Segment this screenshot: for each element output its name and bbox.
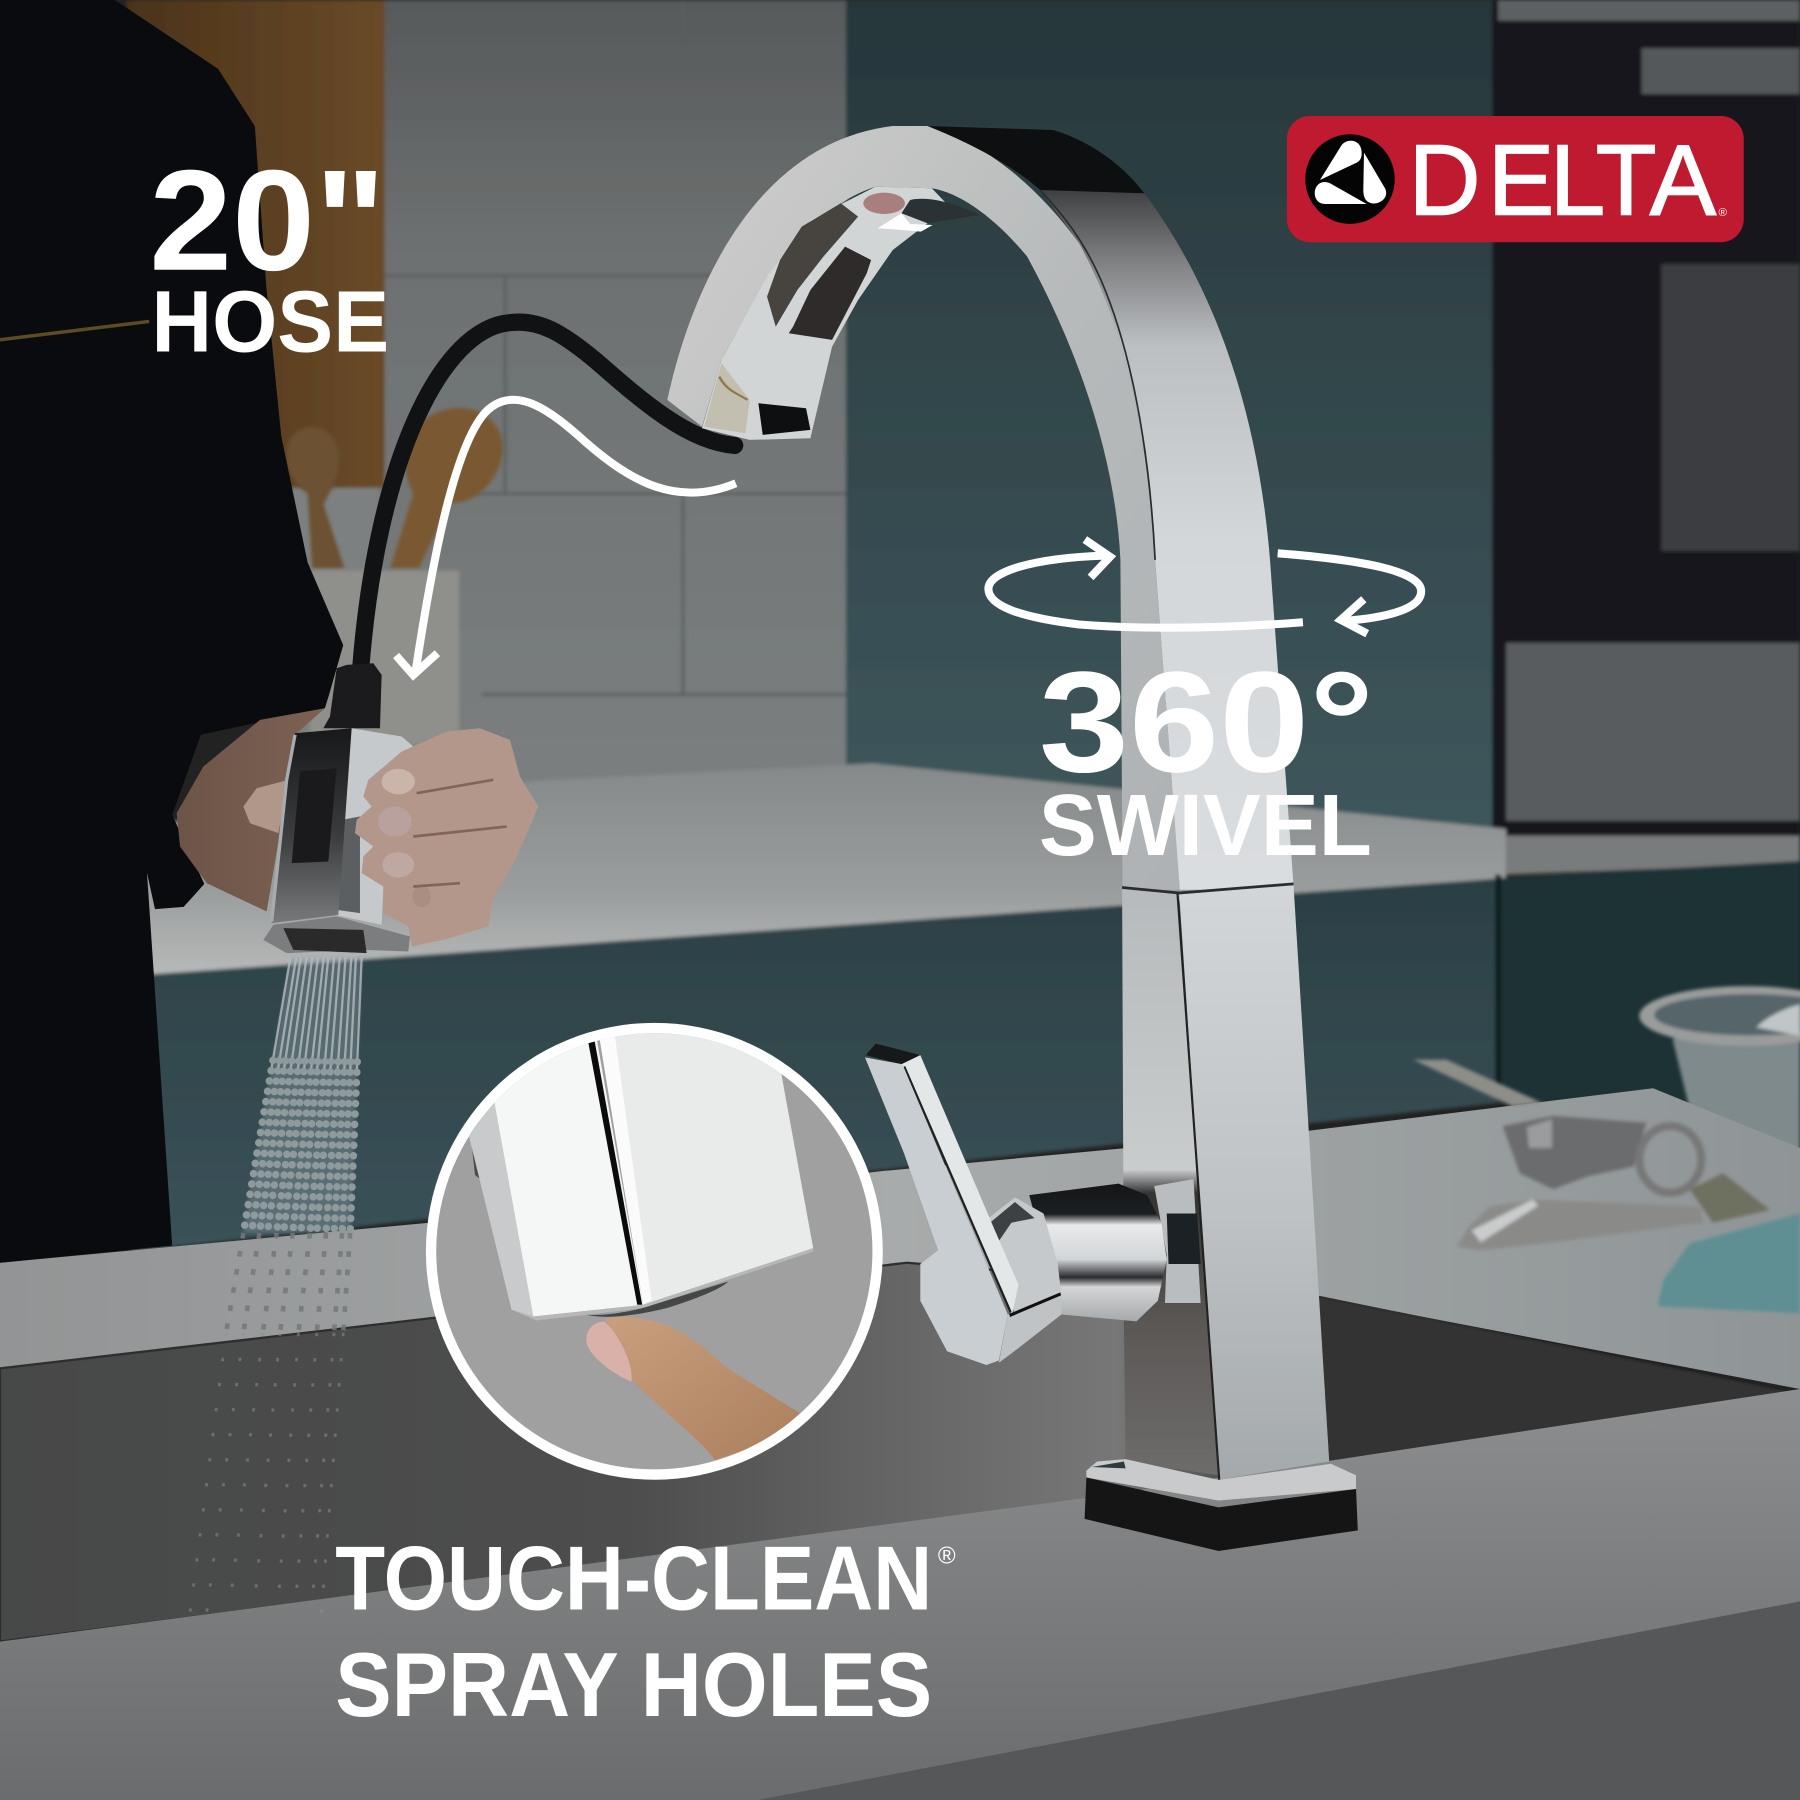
faucet: lower body and handle — [865, 884, 1358, 1551]
callout: touch-clean spray holes — [335, 1528, 956, 1736]
swivel figure: 360° — [1039, 642, 1374, 802]
faucet: lever lower edge — [999, 1294, 1061, 1363]
faucet: lever top cap — [866, 1044, 920, 1064]
spray: translucent column — [243, 957, 362, 1233]
faucet: handle hub — [988, 1197, 1061, 1315]
registered mark: ® — [938, 1543, 956, 1570]
callout: 360 degree swivel — [988, 540, 1421, 874]
spray: stream lines near the nozzle — [270, 958, 363, 1069]
kitchen: wooden utensils and cup — [287, 408, 503, 746]
callout: 20 inch hose — [149, 141, 736, 675]
faucet: base plate — [1086, 1459, 1356, 1500]
faucet: aerator tip — [758, 403, 810, 435]
sink basin — [0, 1263, 1800, 1642]
arrow: hose reach — [396, 400, 736, 675]
faucet: lever side — [901, 1055, 1019, 1315]
inset grey disc — [436, 1033, 872, 1469]
hose length figure: 20" — [149, 141, 386, 301]
faucet — [667, 126, 1358, 1551]
swivel label: SWIVEL — [1039, 777, 1372, 874]
spray: falling droplets in sink — [189, 1333, 343, 1617]
sprayer head close-up — [469, 1033, 814, 1320]
registered mark: ® — [1718, 207, 1727, 219]
logo: Delta — [1287, 116, 1744, 242]
faucet: lever front — [865, 1057, 1008, 1365]
thumb — [243, 780, 288, 833]
inset white ring — [426, 1023, 883, 1480]
faucet: handle barrel — [1029, 1184, 1167, 1321]
faucet: escutcheon — [1154, 1179, 1201, 1303]
counter edge — [758, 1601, 1800, 1800]
sprayer head — [263, 728, 413, 953]
spray: droplets over counter — [226, 1233, 350, 1333]
forearm — [177, 708, 325, 911]
kitchen: mixing bowl — [1639, 986, 1800, 1217]
callout line one: TOUCH-CLEAN — [335, 1528, 932, 1629]
front countertop — [0, 1088, 1800, 1389]
pull-down hose — [360, 322, 735, 672]
faucet: body right face — [1179, 885, 1329, 1480]
faucet: body left face — [1122, 887, 1219, 1475]
logo wordmark: DELTA — [1409, 126, 1717, 237]
faucet: chrome underside of spout — [702, 187, 979, 440]
logo mark — [1305, 134, 1395, 224]
pull-out sprayer and hand — [243, 663, 538, 953]
callout line two: SPRAY HOLES — [335, 1635, 932, 1736]
arrow: left swivel arc — [988, 540, 1303, 628]
jacket zipper — [0, 321, 149, 340]
hose label: HOSE — [152, 273, 389, 370]
hand — [355, 728, 538, 946]
faucet: neck and arch — [667, 126, 1294, 890]
spray: blurred droplets — [241, 1056, 361, 1232]
measuring cups — [1413, 1060, 1770, 1250]
fingertip — [586, 1317, 800, 1460]
person in dark clothes — [0, 0, 343, 1263]
inset: finger on touch-clean spray face — [426, 1000, 883, 1480]
counter deck — [0, 1389, 1800, 1800]
logo badge — [1287, 116, 1744, 242]
blue towel — [1658, 1213, 1800, 1313]
arrow: right swivel arc — [1278, 553, 1421, 634]
hose collar — [323, 663, 382, 728]
water spray — [189, 957, 362, 1617]
